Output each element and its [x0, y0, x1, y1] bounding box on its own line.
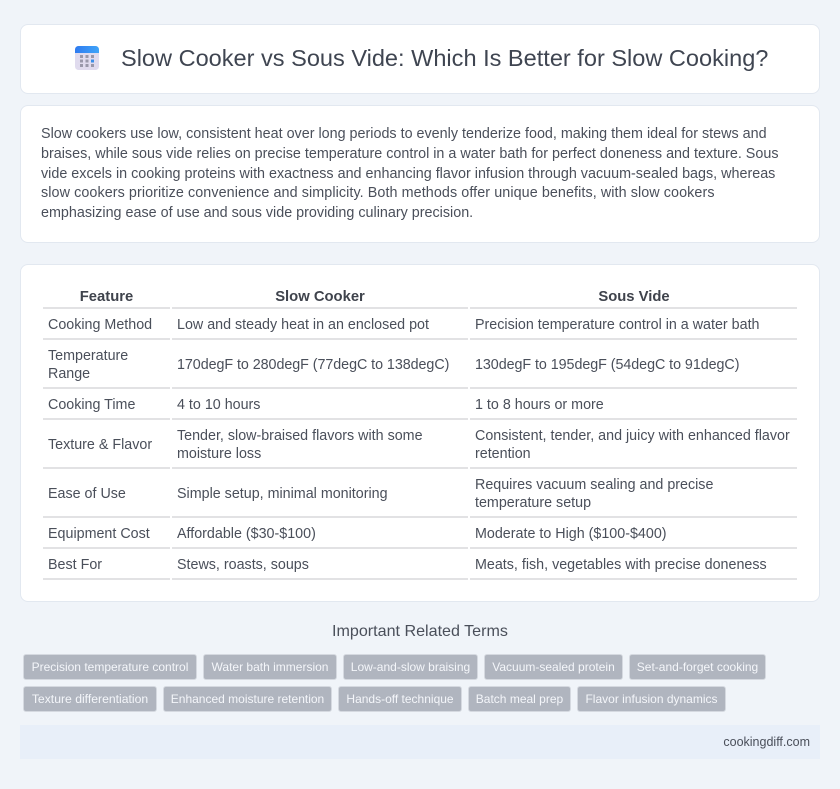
row: temperature range: 170degF to 280degF (77degC to 138degC)	[177, 357, 449, 373]
row: equipment cost	[48, 526, 667, 542]
panel: header	[20, 24, 820, 94]
icon: calendar	[75, 46, 99, 70]
text: introduction paragraph: vide excels in cooking proteins with exactness and enhancing flavor infusion through vacuum-sealed bags, whereas	[41, 166, 775, 182]
heading: important related terms: Important Related Terms	[332, 622, 508, 640]
title: Slow Cooker vs Sous Vide: Which Is Better for Slow Cooking?	[121, 45, 768, 71]
row: best for	[48, 557, 767, 573]
row: texture and flavor: moisture loss	[177, 446, 261, 462]
tag: Hands-off technique	[346, 692, 454, 706]
table header	[80, 289, 670, 305]
row: equipment cost: Moderate to High ($100-$400)	[475, 526, 667, 542]
row: texture and flavor: Texture & Flavor	[48, 437, 152, 453]
row: best for: Meats, fish, vegetables with precise doneness	[475, 557, 767, 573]
tag: Low-and-slow braising	[351, 660, 470, 674]
row: equipment cost: Affordable ($30-$100)	[177, 526, 316, 542]
row: ease of use: Ease of Use	[48, 486, 126, 502]
tag: Water bath immersion	[212, 660, 328, 674]
table header: Slow Cooker	[275, 289, 365, 305]
tag: Set-and-forget cooking	[637, 660, 758, 674]
tag: Enhanced moisture retention	[171, 692, 324, 706]
row: best for: Best For	[48, 557, 102, 573]
table header: Sous Vide	[598, 289, 670, 305]
tag	[577, 686, 726, 712]
related term tags	[23, 654, 766, 712]
row: temperature range: Range	[48, 366, 90, 382]
row: texture and flavor	[48, 428, 790, 462]
text: introduction paragraph: braises, while sous vide relies on precise temperature control in a water bath for perfect doneness and texture. Sous	[41, 146, 779, 162]
text: introduction paragraph: slow cookers prioritize convenience and simplicity. Both methods offer unique benefits, with slow cookers	[41, 185, 715, 201]
panel: introduction	[20, 105, 820, 243]
tag: Batch meal prep	[476, 692, 563, 706]
row: cooking time: Cooking Time	[48, 397, 135, 413]
row: temperature range	[48, 348, 739, 382]
row: best for: Stews, roasts, soups	[177, 557, 309, 573]
row: cooking time: 1 to 8 hours or more	[475, 397, 604, 413]
row: cooking method: Low and steady heat in an enclosed pot	[177, 317, 429, 333]
tag	[23, 686, 157, 712]
tag: Texture differentiation	[32, 692, 148, 706]
row: texture and flavor: retention	[475, 446, 531, 462]
row: ease of use: temperature setup	[475, 495, 591, 511]
row: ease of use	[48, 477, 713, 511]
row: cooking time	[48, 397, 604, 413]
row: cooking method	[48, 317, 760, 333]
tag	[629, 654, 766, 680]
tag: Vacuum-sealed protein	[492, 660, 615, 674]
row: temperature range: Temperature	[48, 348, 128, 364]
tag	[338, 686, 462, 712]
row: cooking method: Precision temperature control in a water bath	[475, 317, 760, 333]
text: introduction paragraph: Slow cookers use low, consistent heat over long periods to evenly tenderize food, making them ideal for stews and	[41, 126, 767, 142]
panel: comparison table	[20, 264, 820, 602]
tag	[23, 654, 197, 680]
text: introduction paragraph: emphasizing ease of use and sous vide providing culinary precision.	[41, 205, 473, 221]
tag: Precision temperature control	[32, 660, 188, 674]
table header: Feature	[80, 289, 133, 305]
tag	[203, 654, 337, 680]
footer bar	[20, 725, 820, 759]
tag	[484, 654, 623, 680]
row: cooking method: Cooking Method	[48, 317, 152, 333]
row: ease of use: Requires vacuum sealing and precise	[475, 477, 713, 493]
row: texture and flavor: Consistent, tender, and juicy with enhanced flavor	[475, 428, 790, 444]
tag	[468, 686, 571, 712]
row: temperature range: 130degF to 195degF (54degC to 91degC)	[475, 357, 739, 373]
tag	[163, 686, 332, 712]
row: equipment cost: Equipment Cost	[48, 526, 150, 542]
tag	[343, 654, 478, 680]
row: texture and flavor: Tender, slow-braised flavors with some	[177, 428, 423, 444]
footer source text: cookingdiff.com	[723, 735, 810, 749]
row: ease of use: Simple setup, minimal monitoring	[177, 486, 388, 502]
tag: Flavor infusion dynamics	[585, 692, 718, 706]
row: cooking time: 4 to 10 hours	[177, 397, 260, 413]
text: introduction paragraph	[41, 126, 779, 221]
